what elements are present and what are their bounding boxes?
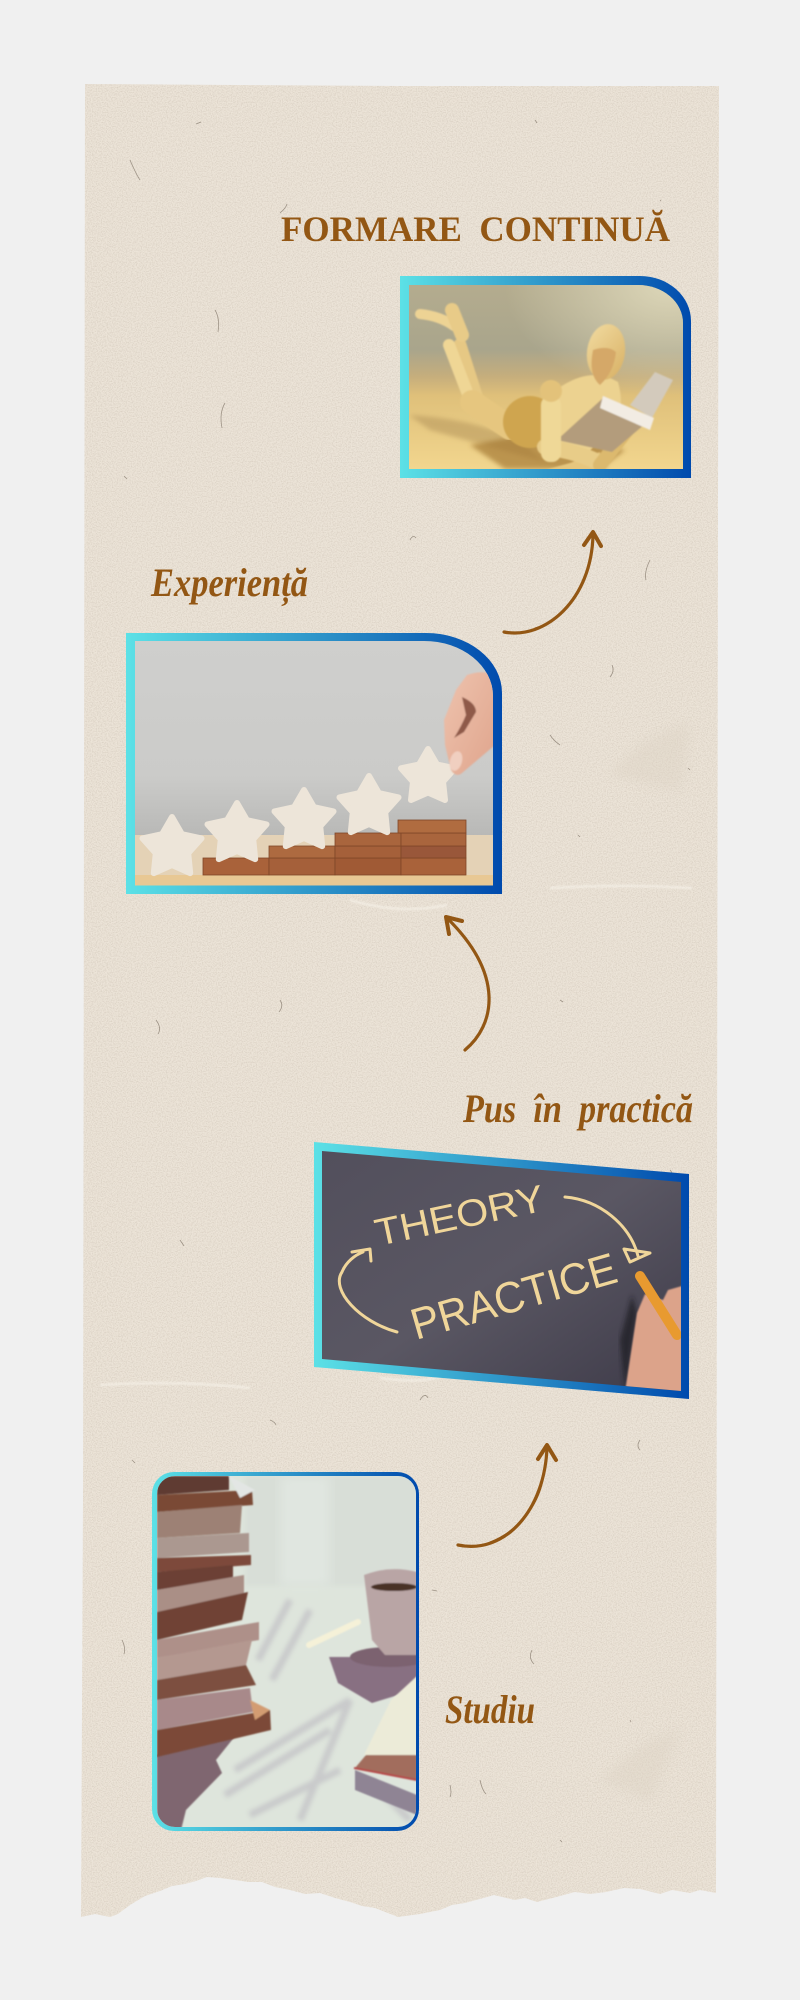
panel frame: [400, 276, 691, 478]
title: FORMARE CONTINUĂ: [281, 209, 670, 249]
chalkboard photo: PRACTICE: [405, 1244, 623, 1350]
hand: [444, 672, 495, 775]
photo panel: stars on wooden steps: [126, 633, 502, 894]
book stack: [157, 1476, 271, 1757]
photo panel: stack of books and coffee: [152, 1472, 430, 1831]
books photo: [157, 1476, 430, 1830]
chalkboard photo: [322, 1150, 682, 1395]
table shadow: [157, 1738, 234, 1827]
label: Studiu: Studiu: [445, 1687, 535, 1732]
hand with chalk: [620, 1295, 637, 1392]
mannequin photo: [409, 285, 683, 470]
wooden blocks: [203, 820, 466, 875]
stars: [142, 749, 455, 873]
chalk arrows: [339, 1197, 650, 1332]
arrow: experience to continuing education: [504, 532, 601, 633]
chalkboard photo: THEORY: [371, 1178, 548, 1255]
stars photo: [135, 641, 495, 886]
infographic canvas: [81, 84, 719, 1917]
torn paper sheet: [78, 80, 723, 1920]
coffee cup: [309, 1569, 430, 1703]
label: Pus în practică: Pus în practică: [462, 1086, 693, 1131]
photo panel: theory and practice chalkboard: [314, 1142, 689, 1399]
label: Experiență: Experiență: [150, 560, 308, 606]
table stripes: [225, 1600, 410, 1820]
panel frame: [152, 1472, 419, 1831]
panel frame: [126, 633, 502, 894]
open book: [354, 1676, 417, 1815]
arrow: study to practice: [458, 1445, 556, 1546]
photo panel: wooden mannequin reading: [400, 276, 691, 478]
arrow: practice to experience: [446, 917, 489, 1050]
panel frame: [314, 1142, 689, 1399]
